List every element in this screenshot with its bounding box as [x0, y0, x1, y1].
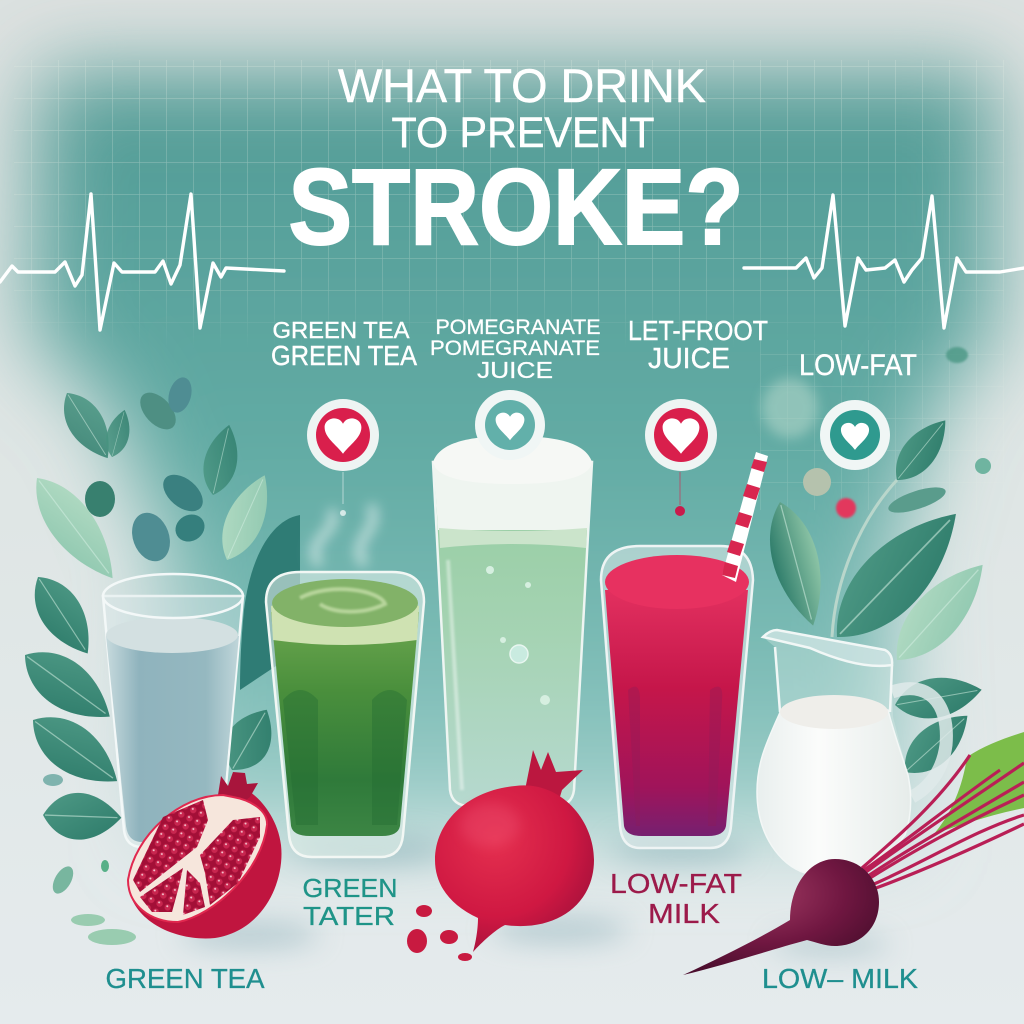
label: low-fat: LOW-FAT	[799, 349, 917, 382]
label: green tea: GREEN TEA	[271, 340, 417, 371]
tall glass of pale green drink	[433, 436, 592, 806]
pomegranate half	[128, 772, 281, 938]
label: beet root juice: JUICE	[648, 343, 730, 375]
glass of water	[103, 574, 243, 847]
icon: heartbeat line left	[0, 194, 284, 330]
title	[288, 59, 744, 267]
caption: green tater: GREEN	[302, 873, 398, 903]
left foliage	[11, 375, 300, 841]
beetroot	[683, 732, 1024, 975]
badge: green tea heart	[307, 399, 379, 516]
title: TO PREVENT	[392, 109, 654, 157]
label: beet root juice: LET-FROOT	[628, 315, 768, 346]
title: WHAT TO DRINK	[338, 59, 706, 112]
label: pomegranate juice	[430, 316, 600, 383]
badge: low-fat heart	[820, 400, 890, 470]
icon: heartbeat line right	[744, 195, 1024, 328]
small green pebbles	[49, 860, 136, 945]
badge: juice heart	[645, 399, 717, 516]
glass of red juice with straw	[601, 452, 768, 848]
caption: low milk: LOW– MILK	[762, 963, 918, 994]
label: beet root juice	[628, 315, 768, 375]
pomegranate seeds	[407, 905, 472, 961]
caption: low-fat milk: LOW-FAT	[610, 868, 742, 899]
right foliage	[758, 347, 1000, 786]
caption: green tater	[302, 873, 398, 931]
glass of green tea	[266, 505, 424, 857]
caption: green tater: TATER	[303, 901, 395, 931]
label: green tea	[271, 317, 417, 371]
caption: green tea: GREEN TEA	[106, 963, 265, 994]
label: pomegranate juice: POMEGRANATE	[430, 337, 600, 360]
object shadows on table	[180, 836, 890, 954]
caption: low-fat milk: MILK	[648, 898, 720, 929]
caption: low-fat milk	[610, 868, 742, 929]
jug of milk	[757, 630, 946, 874]
title: STROKE?	[288, 146, 744, 267]
whole pomegranate	[435, 750, 594, 952]
label: pomegranate juice: POMEGRANATE	[436, 316, 600, 339]
label: pomegranate juice: JUICE	[477, 357, 553, 383]
badge: pomegranate heart	[475, 390, 545, 460]
label: green tea: GREEN TEA	[272, 317, 410, 343]
